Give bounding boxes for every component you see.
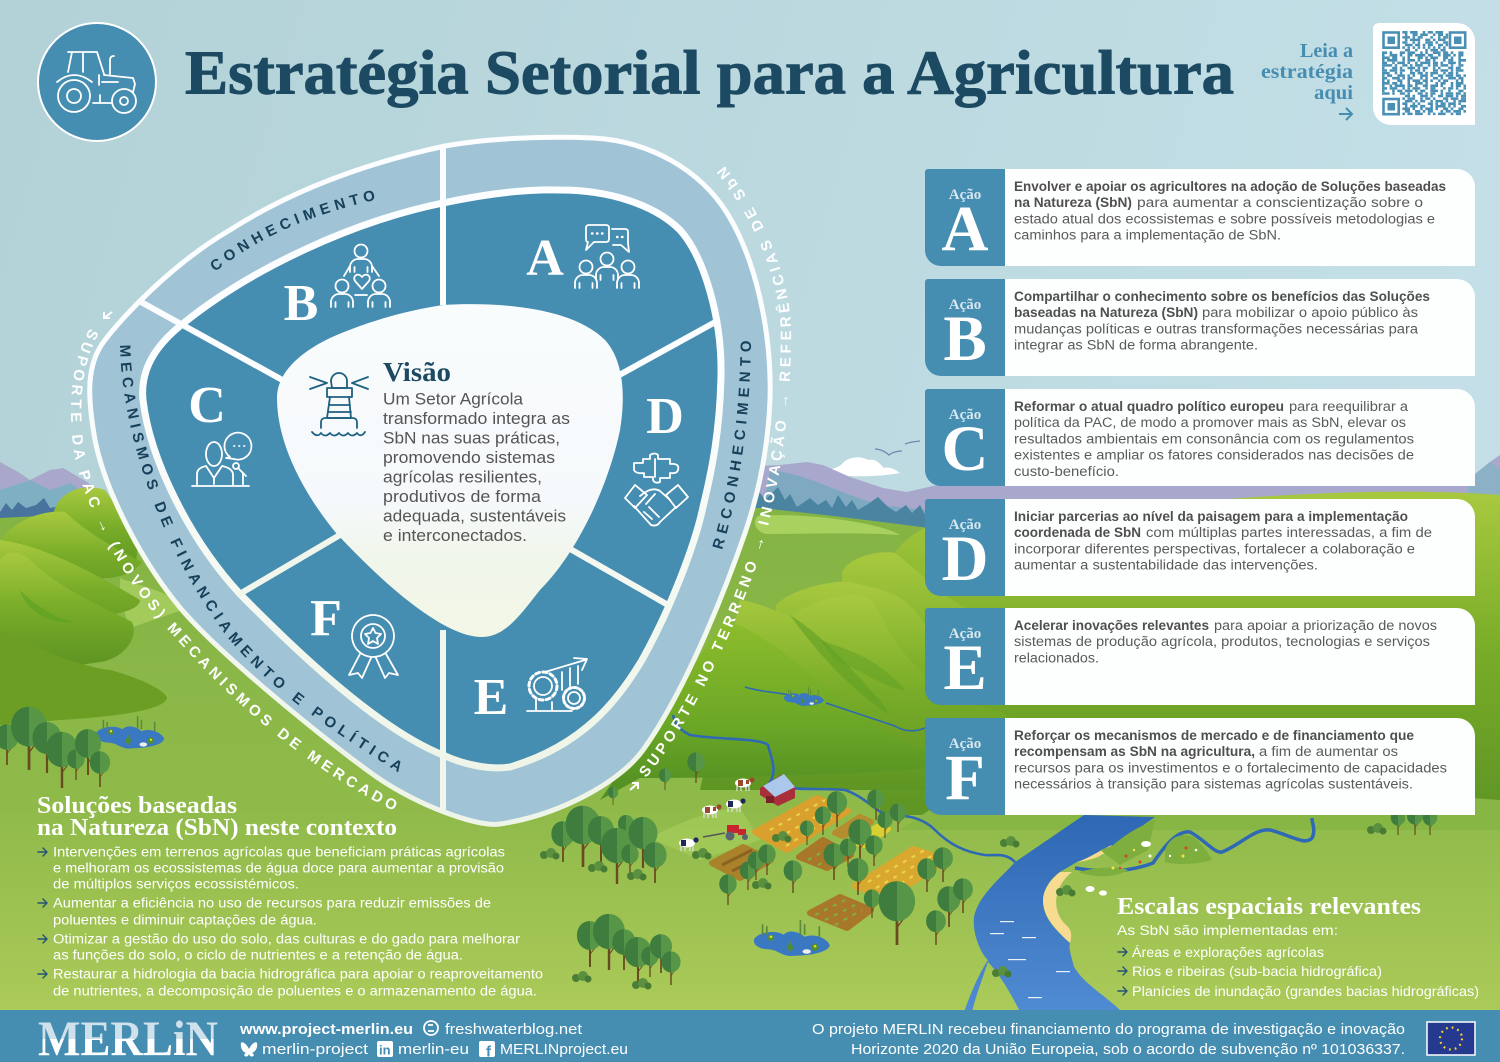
link to strategy text: aqui	[1314, 82, 1353, 104]
action F description: necessários à transição para sistemas agrícolas sustentáveis.	[1014, 777, 1413, 792]
panel: action D	[925, 499, 1475, 596]
flower meadows and sheep	[1078, 820, 1212, 896]
ponds	[96, 687, 830, 956]
letter and icon: F: F	[310, 590, 342, 647]
funding statement	[812, 1022, 1405, 1058]
action D description: Iniciar parcerias ao nível da paisagem para a implementação	[1014, 509, 1408, 524]
action C description: custo-benefício.	[1014, 464, 1119, 479]
vision centre	[277, 304, 623, 637]
footer links: in	[379, 1042, 391, 1058]
action A badge	[925, 169, 1005, 266]
action F description	[1005, 718, 1475, 815]
clouds and birds	[817, 441, 920, 476]
panel: action E	[925, 608, 1475, 705]
field rows	[722, 800, 942, 925]
action A badge: Ação	[949, 187, 981, 203]
action C badge	[925, 389, 1005, 486]
scales intro: As SbN são implementadas em:	[1117, 923, 1338, 938]
link to strategy text	[1261, 40, 1353, 120]
footer bar	[0, 1010, 1500, 1062]
action F description: recompensam as SbN na agricultura,	[1014, 744, 1255, 759]
title: Estratégia Setorial para a Agricultura	[185, 40, 1234, 108]
light meadow strips	[120, 515, 900, 860]
action C badge: C	[942, 413, 988, 485]
action B description	[1005, 279, 1475, 376]
footer links: f	[486, 1044, 492, 1060]
letter and icon: C	[188, 377, 251, 486]
inner blue wheel	[143, 190, 721, 768]
vision statement: e interconectados.	[383, 527, 527, 545]
action B badge: B	[943, 303, 987, 375]
action C description: para reequilibrar a	[1289, 399, 1409, 414]
action D description	[1005, 499, 1475, 596]
action F description: Reforçar os mecanismos de mercado e de financiamento que	[1014, 728, 1414, 743]
band label: reconhecimento: RECONHECIMENTO	[712, 341, 752, 550]
panel: action F	[925, 718, 1475, 815]
footer links: freshwaterblog.net	[445, 1022, 582, 1038]
arrow: outer ring start right	[630, 783, 638, 790]
scales list: Planícies de inundação (grandes bacias hidrográficas)	[1132, 984, 1479, 999]
QR code	[1373, 23, 1475, 125]
vision statement: produtivos de forma	[383, 488, 542, 506]
action B description: para mobilizar o apoio público às	[1202, 305, 1418, 320]
bullet list: Restaurar a hidrologia da bacia hidrográfica para apoiar o reaproveitamento	[53, 966, 543, 982]
action E badge	[925, 608, 1005, 705]
outer band	[90, 137, 770, 824]
action D description: aumentar a sustentabilidade das intervenções.	[1014, 558, 1318, 573]
arrow: outer ring start left	[104, 312, 112, 318]
letter and icon: C: C	[188, 377, 226, 434]
action B description: Compartilhar o conhecimento sobre os benefícios das Soluções	[1014, 289, 1430, 304]
action A description: caminhos para a implementação de SbN.	[1014, 228, 1281, 243]
bullet list: Aumentar a eficiência no uso de recursos para reduzir emissões de	[53, 896, 491, 910]
band label: conhecimento: CONHECIMENTO	[211, 190, 374, 270]
action A description	[1005, 169, 1475, 266]
footer links: merlin-project	[262, 1042, 368, 1058]
section heading	[37, 793, 397, 841]
vision statement: adequada, sustentáveis	[383, 508, 566, 526]
vision statement	[383, 390, 570, 545]
action F badge: Ação	[949, 736, 981, 752]
link to strategy text: estratégia	[1261, 61, 1353, 83]
funding statement: O projeto MERLIN recebeu financiamento do programa de investigação e inovação	[812, 1022, 1405, 1038]
letter and icon: D: D	[646, 388, 684, 445]
left hills	[0, 487, 167, 725]
footer links	[239, 1021, 628, 1060]
action A description: estado atual dos ecossistemas e sobre possíveis metodologias e	[1014, 211, 1435, 226]
action E description: para apoiar a priorização de novos	[1214, 618, 1437, 633]
distant mountains	[0, 455, 1500, 530]
bullet list: Otimizar a gestão do uso do solo, das culturas e do gado para melhorar	[53, 932, 521, 946]
bullet list: poluentes e diminuir captações de água.	[53, 912, 317, 928]
letter and icon: E	[474, 658, 587, 726]
action F badge	[925, 718, 1005, 815]
EU flag	[1427, 1022, 1475, 1055]
letter and icon: A: A	[526, 230, 564, 287]
outer white label: support on the ground: SUPORTE NO TERRENO → INOVAÇÃO → REFERÊNCIAS DE SbN	[640, 166, 792, 776]
action A description: para aumentar a conscientização sobre o	[1137, 195, 1423, 210]
action B description: baseadas na Natureza (SbN)	[1014, 305, 1198, 320]
link to strategy text: Leia a	[1300, 40, 1353, 62]
action C description: Reformar o atual quadro político europeu	[1014, 399, 1284, 414]
footer links: merlin-eu	[398, 1042, 469, 1058]
icon: lighthouse	[310, 373, 368, 436]
outer white label: suporte da PAC and market mechanisms: SUPORTE DA PAC → (NOVOS) MECANISMOS DE MERCADO	[71, 330, 396, 810]
vision text block	[310, 357, 570, 545]
vision statement: SbN nas suas práticas,	[383, 430, 560, 448]
action B description: integrar as SbN de forma abrangente.	[1014, 338, 1258, 353]
scales list: Áreas e explorações agrícolas	[1132, 945, 1324, 960]
letter and icon: D	[625, 388, 688, 526]
action E description: sistemas de produção agrícola, produtos, tecnologias e serviços	[1014, 634, 1430, 649]
bullet list: de nutrientes, a decomposição de poluentes e o armazenamento de água.	[53, 984, 537, 998]
bullet list	[53, 844, 543, 998]
action B badge: Ação	[949, 297, 981, 313]
action F description: recursos para os investimentos e o fortalecimento de capacidades	[1014, 760, 1447, 775]
letter and icon: A	[526, 225, 639, 288]
action D description: incorporar diferentes perspectivas, fortalecer a colaboração e	[1014, 541, 1415, 556]
scales list: Rios e ribeiras (sub-bacia hidrográfica)	[1132, 964, 1382, 979]
panel: action A	[925, 169, 1475, 266]
action C description: existentes e ampliar os fatores considerados nas decisões de	[1014, 448, 1414, 463]
letter and icon: B: B	[284, 275, 318, 332]
letter and icon: E: E	[474, 669, 508, 726]
action C description	[1005, 389, 1475, 486]
action D badge	[925, 499, 1005, 596]
footer links: www.project-merlin.eu	[239, 1022, 413, 1038]
segment dividers	[141, 148, 719, 810]
vision heading: Visão	[383, 357, 451, 387]
tractor and cattle	[679, 777, 755, 851]
action C description: resultados ambientais em consonância com os regulamentos	[1014, 431, 1414, 446]
action F badge: F	[945, 742, 985, 814]
trees and bushes	[0, 707, 1437, 990]
action E description	[1005, 608, 1475, 705]
tree lines	[0, 487, 925, 530]
vision statement: agrícolas resilientes,	[383, 468, 542, 486]
bullet arrows	[38, 848, 47, 978]
funding statement: Horizonte 2020 da União Europeia, sob o acordo de subvenção nº 101036337.	[851, 1042, 1405, 1058]
strategy diagram shield	[87, 134, 773, 827]
scales heading: Escalas espaciais relevantes	[1117, 894, 1421, 920]
action A description: Envolver e apoiar os agricultores na adoção de Soluções baseadas	[1014, 179, 1446, 194]
panel: action B	[925, 279, 1475, 376]
landscape background	[0, 441, 1500, 1012]
panel: action C	[925, 389, 1475, 486]
river network	[673, 687, 1314, 1012]
action E description: relacionados.	[1014, 650, 1099, 665]
action E description: Acelerar inovações relevantes	[1014, 618, 1209, 633]
action C badge: Ação	[949, 407, 981, 423]
barn	[760, 774, 795, 806]
bullet list: de múltiplos serviços ecossistémicos.	[53, 876, 299, 892]
section heading: Soluções baseadas	[37, 793, 237, 819]
bullet list: e melhoram os ecossistemas de água doce para aumentar a provisão	[53, 860, 504, 876]
crop fields	[712, 798, 948, 928]
action A badge: A	[942, 193, 989, 265]
scales list	[1132, 945, 1479, 999]
action E badge: Ação	[949, 626, 981, 642]
vision statement: transformado integra as	[383, 410, 570, 428]
band label: mecanismos de financiamento e política: MECANISMOS DE FINANCIAMENTO E POLÍTICA	[120, 346, 400, 772]
letter and icon: F	[310, 590, 398, 678]
text block: nature-based solutions in context	[37, 793, 543, 998]
right hills	[600, 492, 1500, 830]
bullet list: as funções do solo, o ciclo de nutrientes e a retenção de água.	[53, 948, 463, 962]
action D badge: Ação	[949, 517, 981, 533]
action D description: com múltiplas partes interessadas, a fim de	[1146, 525, 1432, 540]
action E badge: E	[943, 632, 987, 704]
tractor logo badge	[38, 23, 156, 141]
vision statement: Um Setor Agrícola	[383, 390, 524, 408]
scales arrows	[1118, 948, 1127, 995]
action D badge: D	[942, 523, 988, 595]
action D description: coordenada de SbN	[1014, 525, 1141, 540]
vision statement: promovendo sistemas	[383, 449, 555, 467]
action B description: mudanças políticas e outras transformações necessárias para	[1014, 321, 1419, 336]
action C description: política da PAC, de modo a promover mais as SbN, elevar os	[1014, 415, 1406, 430]
action F description: a fim de aumentar os	[1259, 744, 1398, 759]
letter and icon: B	[284, 244, 390, 332]
section heading: na Natureza (SbN) neste contexto	[37, 815, 397, 841]
green ground	[0, 505, 1500, 1012]
text block: relevant spatial scales	[1117, 894, 1479, 999]
footer links: MERLINproject.eu	[500, 1042, 628, 1058]
action B badge	[925, 279, 1005, 376]
action A description: na Natureza (SbN)	[1014, 195, 1132, 210]
bullet list: Intervenções em terrenos agrícolas que beneficiam práticas agrícolas	[53, 844, 505, 860]
